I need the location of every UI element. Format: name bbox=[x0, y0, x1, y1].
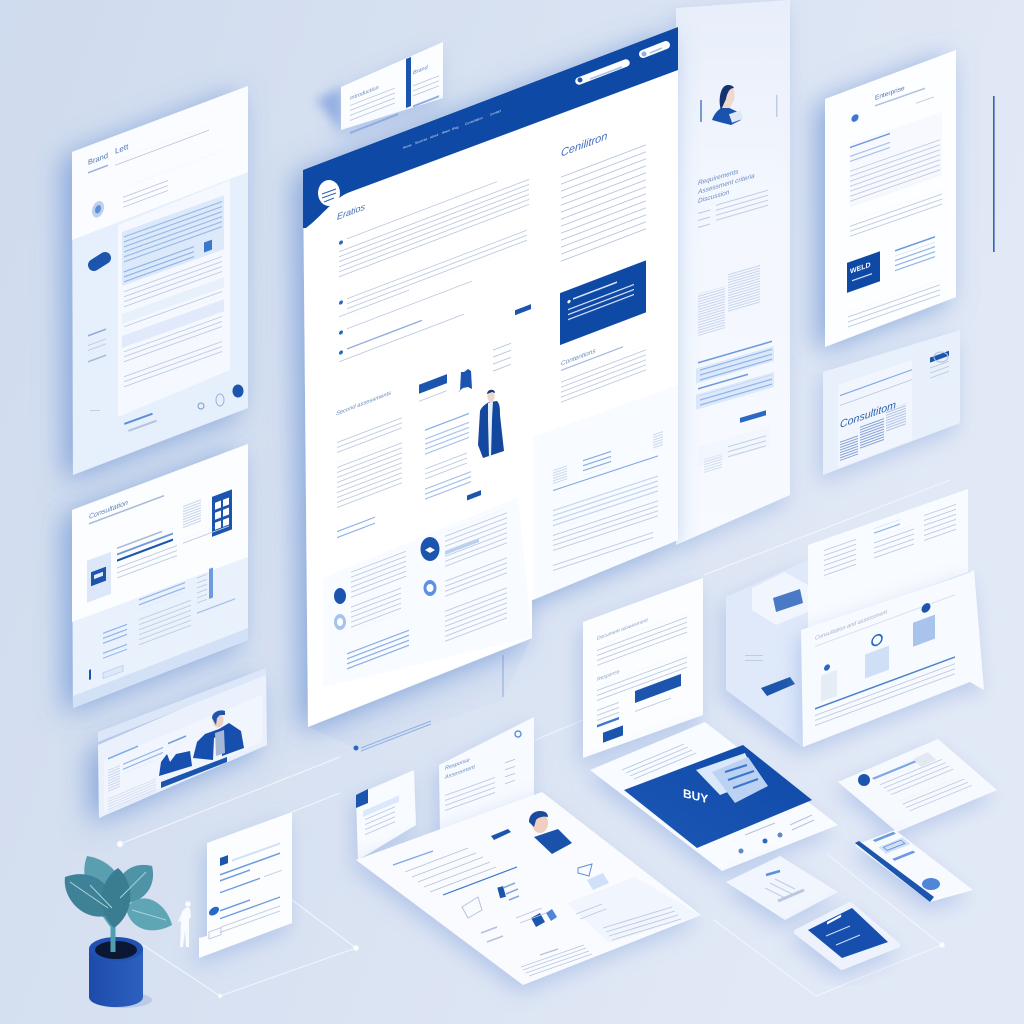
heading: Enterprise bbox=[875, 85, 905, 102]
small icons bbox=[209, 905, 219, 917]
illustration: presenter bbox=[159, 710, 244, 788]
lower text blocks bbox=[516, 904, 681, 976]
panel: back sheet large: Response bbox=[445, 757, 470, 772]
panel: document with form: Response bbox=[597, 669, 620, 683]
panel: video card with presenter bbox=[98, 668, 267, 818]
heading: Cenilitron: Cenilitron bbox=[561, 130, 607, 160]
panel: document with form: Document assessment bbox=[597, 617, 648, 642]
heading bbox=[393, 851, 433, 865]
logo circle bbox=[318, 180, 340, 206]
header band bbox=[303, 27, 678, 228]
text: strip heading and lines: Requirements bbox=[698, 168, 739, 187]
panel: note on floor bbox=[199, 812, 292, 958]
illustration: papers bbox=[696, 753, 768, 803]
panel: back sheet large: Assessment bbox=[444, 764, 475, 781]
navigation: Consultation bbox=[465, 116, 483, 126]
blue tile bbox=[847, 251, 880, 293]
blue bar bbox=[635, 674, 681, 703]
table icon bbox=[212, 489, 232, 537]
text block lines bbox=[405, 848, 496, 892]
footer icons bbox=[90, 384, 244, 432]
panel: open brochure bbox=[590, 722, 838, 871]
vertical accent line bbox=[993, 96, 995, 252]
text blocks: two column table bbox=[698, 264, 760, 336]
navigation: Contact bbox=[490, 109, 501, 117]
chart card bbox=[87, 552, 111, 603]
figure: small white person bbox=[178, 901, 191, 947]
panel: left tall document bbox=[72, 86, 248, 475]
lower text bbox=[103, 622, 127, 645]
phone button bbox=[922, 878, 940, 890]
navigation: Blog bbox=[452, 125, 459, 131]
panel: folded box cluster: Consultation and assessment bbox=[815, 609, 887, 642]
navigation: About bbox=[430, 133, 438, 140]
long blue caption line bbox=[354, 721, 431, 751]
navigation bbox=[403, 109, 501, 150]
panel: document with form bbox=[583, 578, 703, 758]
stamp bbox=[913, 752, 936, 767]
mini sketches bbox=[462, 864, 609, 955]
lower section tint bbox=[323, 497, 532, 687]
subheading: Contentions: Contentions bbox=[561, 347, 596, 368]
guide lines bbox=[117, 480, 950, 998]
mini table bbox=[773, 589, 803, 612]
dark chip bbox=[761, 677, 795, 696]
panel: phone card bbox=[855, 830, 973, 902]
thin drop line bbox=[502, 655, 504, 697]
lower section text bbox=[347, 508, 507, 681]
heading: Consultation bbox=[89, 498, 128, 521]
navigation: Home bbox=[403, 143, 412, 150]
panel: mid-left document bbox=[72, 444, 248, 708]
panel: tall right strip bbox=[676, 0, 790, 545]
highlighted lines bbox=[696, 340, 774, 410]
heading: Lett bbox=[115, 142, 129, 156]
icons: round badges bbox=[334, 537, 440, 630]
panel: small note bbox=[726, 856, 838, 920]
illustration: man bust bbox=[529, 811, 572, 854]
panel: main web page bbox=[303, 27, 678, 727]
right column text bbox=[561, 143, 646, 266]
shadow under main page bbox=[308, 640, 530, 750]
panel: back sheet large bbox=[439, 717, 534, 835]
text: strip heading and lines: Assessment criteria bbox=[697, 173, 755, 196]
side button and labels bbox=[94, 258, 105, 265]
button bbox=[603, 725, 623, 743]
blue label bbox=[419, 374, 447, 394]
panel: large open document on floor bbox=[356, 792, 701, 985]
panel: folded box cluster bbox=[726, 489, 984, 747]
blue chip bbox=[740, 410, 766, 423]
small mark bbox=[204, 240, 212, 252]
heading: Eratios: Eratios bbox=[337, 202, 365, 222]
header pills bbox=[578, 45, 666, 82]
panel: back sheet small bbox=[356, 770, 416, 860]
panel: right document bbox=[825, 50, 956, 347]
panel: small top card: Brand bbox=[413, 65, 428, 76]
main page content bbox=[336, 95, 646, 685]
icon: potted plant bbox=[65, 856, 172, 1008]
illustration: man in suit bbox=[478, 390, 504, 458]
section: services text: Second assessments bbox=[336, 391, 391, 417]
panel: letter bbox=[838, 739, 997, 832]
panel: phone bbox=[797, 905, 897, 967]
heading bbox=[88, 105, 228, 221]
footer icons bbox=[738, 815, 814, 854]
callout: blue box bbox=[560, 260, 646, 345]
text: strip heading and lines: Discussion bbox=[698, 189, 730, 205]
panel: small top card bbox=[316, 42, 443, 134]
text: strip heading and lines bbox=[696, 158, 774, 476]
panel: right document: WELD bbox=[850, 260, 871, 276]
navigation: Services bbox=[415, 137, 428, 145]
heading: Brand bbox=[88, 151, 108, 167]
icon: badge bbox=[515, 731, 521, 737]
panel: small top card: Introduction bbox=[350, 85, 379, 102]
highlighted text area bbox=[118, 180, 230, 417]
blue tag bbox=[491, 829, 511, 840]
panel: consultation card bbox=[823, 330, 960, 475]
panel: overlapping document bbox=[533, 385, 678, 600]
navigation: News bbox=[442, 128, 450, 135]
icon: small book bbox=[458, 369, 472, 392]
heading: Consultitom: Consultitom bbox=[840, 399, 896, 431]
illustration: woman with laptop bbox=[700, 85, 778, 125]
bullets and paragraphs bbox=[339, 168, 531, 382]
back card bbox=[808, 489, 968, 630]
text: brochure mark: BUY bbox=[683, 786, 708, 806]
front card bbox=[801, 570, 984, 747]
